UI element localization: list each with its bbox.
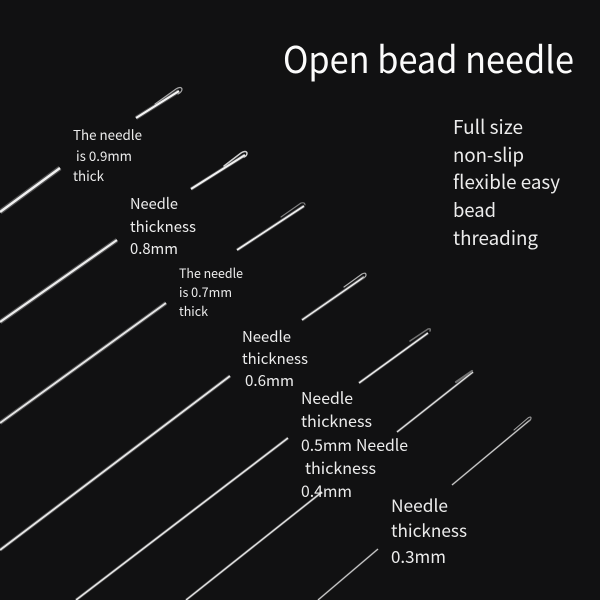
label: 0.4mm: 0.4mm (301, 478, 352, 502)
text block: product features: bead (453, 196, 496, 223)
label: 0.3mm (391, 492, 467, 568)
label: 0.8mm (130, 193, 196, 259)
needle 0.3mm (318, 417, 531, 600)
needle 0.6mm (0, 273, 366, 550)
label: 0.8mm: 0.8mm (130, 238, 178, 259)
label: 0.5mm: Needle (301, 385, 353, 409)
needle 0.9mm (0, 88, 182, 212)
label: 0.3mm: Needle (391, 492, 448, 517)
label: 0.5mm: 0.5mm (301, 432, 352, 456)
label: 0.7mm: is 0.7mm (179, 282, 232, 301)
label: 0.6mm (242, 326, 308, 391)
needle 0.8mm (0, 152, 247, 322)
text block: product features: threading (453, 224, 538, 251)
label: 0.7mm: The needle (179, 263, 243, 282)
label: 0.4mm: thickness (305, 455, 376, 479)
label: 0.9mm: The needle (73, 124, 142, 144)
label: 0.5mm: thickness (301, 408, 372, 432)
text block: product features: Full size (453, 113, 523, 140)
text block: product features (453, 113, 560, 251)
label: 0.4mm (301, 432, 408, 502)
label: 0.7mm (179, 263, 243, 320)
needle 0.4mm (186, 371, 473, 600)
label: 0.5mm (301, 385, 372, 456)
title: Open bead needle (283, 31, 574, 84)
needle 0.7mm (0, 203, 305, 423)
label: 0.7mm: thick (179, 301, 209, 320)
label: 0.9mm (73, 124, 142, 185)
needle 0.5mm (76, 329, 430, 600)
label: 0.6mm: 0.6mm (245, 370, 294, 391)
label: 0.8mm: Needle (130, 193, 178, 214)
text block: product features: flexible easy (453, 168, 560, 195)
label: 0.3mm: 0.3mm (391, 543, 446, 568)
label: 0.4mm: Needle (356, 432, 408, 456)
label: 0.6mm: Needle (242, 326, 291, 347)
label: 0.3mm: thickness (391, 517, 467, 542)
label: 0.9mm: is 0.9mm (76, 145, 132, 165)
label: 0.6mm: thickness (242, 348, 308, 369)
text block: product features: non-slip (453, 141, 524, 168)
label: 0.8mm: thickness (130, 216, 196, 237)
label: 0.9mm: thick (73, 165, 105, 185)
